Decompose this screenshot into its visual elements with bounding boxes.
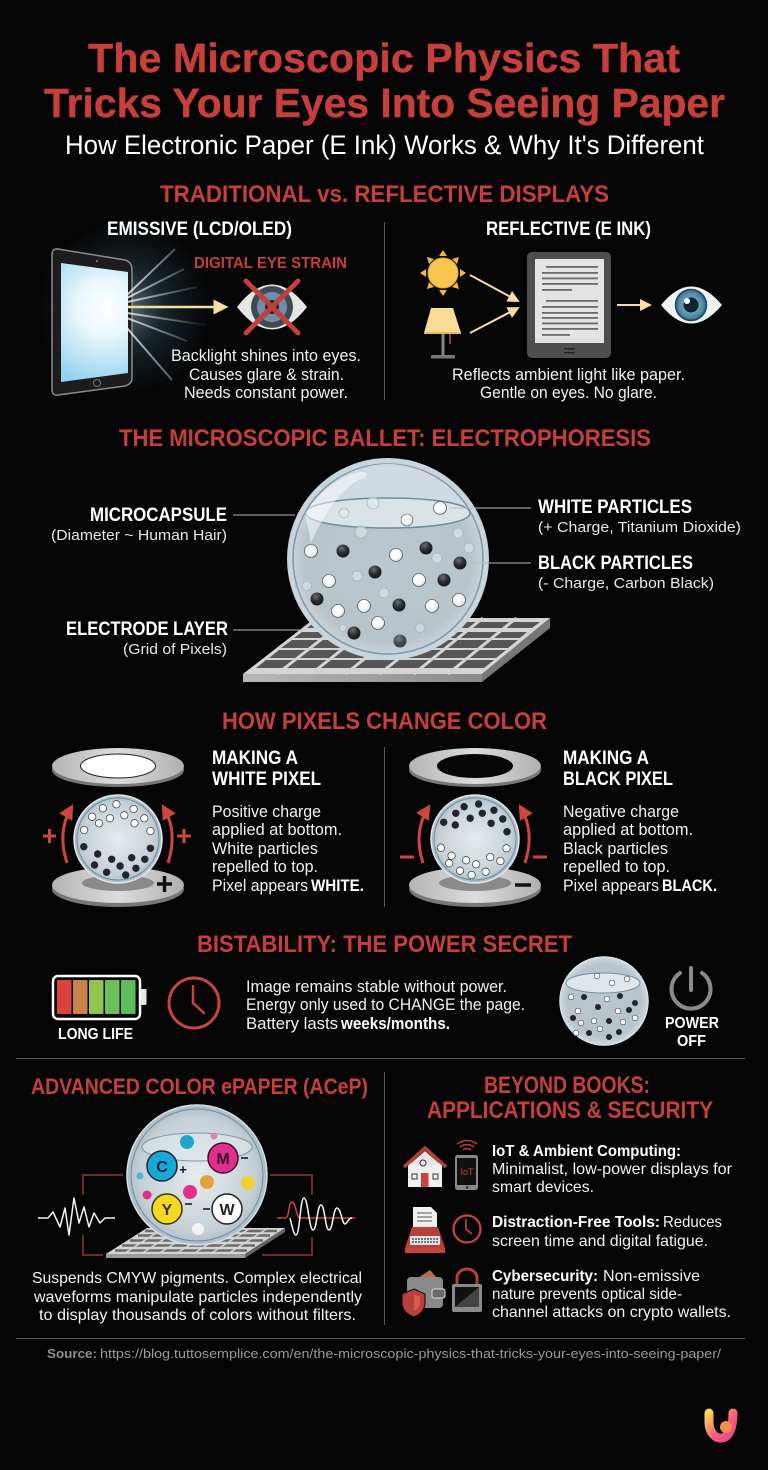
heading: applications and security <box>427 1072 713 1124</box>
icon: clock <box>169 978 219 1028</box>
icon: iot phone: IoT <box>460 1167 474 1177</box>
text: backlight description <box>171 346 361 402</box>
label: white particles: (+ Charge, Titanium Dioxide) <box>538 519 741 536</box>
icon: e-reader <box>527 252 611 358</box>
label: power off <box>665 1015 719 1050</box>
label: white particles <box>450 497 741 536</box>
diagram: white pixel capsule <box>43 748 191 907</box>
text: reflective description: Reflects ambient light like paper. <box>452 365 685 384</box>
label: black particles <box>468 553 714 592</box>
text: cybersecurity <box>492 1268 731 1321</box>
white particles <box>304 502 466 630</box>
text: reflective description: Gentle on eyes. No glare. <box>480 383 657 402</box>
text: white pixel: White particles <box>212 839 318 858</box>
text: black pixel: Pixel appears <box>563 876 659 895</box>
panel: reflective <box>420 219 722 402</box>
label: power off: POWER <box>665 1015 719 1032</box>
text: white pixel: MAKING A <box>212 748 298 769</box>
panel: bistability <box>53 957 719 1050</box>
icon: healthy eye <box>661 286 722 324</box>
source line: https://blog.tuttosemplice.com/en/the-microscopic-physics-that-tricks-your-eyes-into-seeing-paper/ <box>100 1346 721 1361</box>
text: white pixel: Pixel appears <box>212 876 308 895</box>
title: The Microscopic Physics That <box>88 35 680 81</box>
label: electrode layer: (Grid of Pixels) <box>123 641 227 658</box>
text: IoT: smart devices. <box>492 1179 594 1196</box>
arrow: reflected light <box>617 304 650 306</box>
heading: traditional vs reflective: TRADITIONAL vs. REFLECTIVE DISPLAYS <box>160 181 609 208</box>
label: white particles: WHITE PARTICLES <box>538 497 692 518</box>
label: black particles: (- Charge, Carbon Black) <box>538 575 714 592</box>
pigment: yellow <box>152 1194 192 1224</box>
text: cybersecurity: Non-emissive <box>603 1268 700 1285</box>
heading: bistability: BISTABILITY: THE POWER SECRET <box>197 931 572 958</box>
arrow: lamplight <box>470 308 518 333</box>
heading: microscopic ballet: THE MICROSCOPIC BALLET: ELECTROPHORESIS <box>119 425 651 452</box>
icon: battery <box>53 976 146 1019</box>
panel: beyond books <box>402 1072 733 1321</box>
text: black pixel: MAKING A <box>563 748 649 769</box>
diagram: black pixel capsule <box>400 748 547 907</box>
text: ACeP description: to display thousands of colors without filters. <box>39 1307 356 1324</box>
text: cybersecurity: channel attacks on crypto wallets. <box>492 1304 731 1321</box>
icon: typewriter <box>405 1207 445 1253</box>
pigment: cyan: + <box>179 1162 187 1177</box>
panel: black pixel <box>400 748 717 907</box>
callout: digital eye strain: DIGITAL EYE STRAIN <box>194 255 347 272</box>
icon: locked tablet <box>452 1269 482 1312</box>
arrow: light into eye <box>128 306 226 308</box>
text: ACeP description: Suspends CMYW pigments. Complex electrical <box>32 1270 362 1287</box>
label: long life: LONG LIFE <box>58 1026 133 1043</box>
text: backlight description: Backlight shines into eyes. <box>171 346 361 365</box>
text: reflective description <box>452 365 685 402</box>
label: microcapsule: MICROCAPSULE <box>90 505 227 526</box>
icon: stable capsule <box>560 957 648 1045</box>
sphere <box>288 459 488 659</box>
text: distraction free: Reduces <box>663 1214 722 1231</box>
chart: input waveform <box>38 1198 115 1235</box>
text: cybersecurity: nature prevents optical side- <box>492 1286 682 1303</box>
text: black pixel <box>563 748 717 895</box>
text: backlight description: Needs constant power. <box>184 383 348 402</box>
text: IoT: Minimalist, low-power displays for <box>492 1161 733 1178</box>
heading: applications and security: BEYOND BOOKS: <box>484 1072 650 1099</box>
text: black pixel: BLACK PIXEL <box>563 769 673 790</box>
arrow: sunlight <box>470 275 518 301</box>
text: white pixel: WHITE PIXEL <box>212 769 321 790</box>
text: bistability description: Battery lasts <box>246 1014 338 1033</box>
text: black pixel: Negative charge <box>563 802 679 821</box>
pigment: magenta: M <box>216 1151 230 1168</box>
source line: Source: <box>47 1346 97 1361</box>
icon: wallet with shield <box>402 1270 445 1317</box>
text: white pixel <box>212 748 364 895</box>
pigment: white: W <box>219 1202 235 1219</box>
pigment: cyan: C <box>156 1159 168 1176</box>
text: backlight description: Causes glare & strain. <box>189 365 344 384</box>
text: bistability description: Energy only used to CHANGE the page. <box>246 995 525 1014</box>
pigment: yellow: Y <box>162 1202 173 1219</box>
heading: how pixels change color: HOW PIXELS CHANGE COLOR <box>222 708 547 735</box>
panel: advanced color epaper <box>31 1074 368 1324</box>
text: IoT: IoT & Ambient Computing: <box>492 1143 681 1160</box>
diagram: color capsule <box>83 1105 312 1258</box>
panel: white pixel <box>43 748 364 907</box>
black particles <box>310 542 466 648</box>
text: distraction free: Distraction-Free Tools: <box>492 1214 660 1231</box>
text: black pixel: Black particles <box>563 839 668 858</box>
heading: reflective: REFLECTIVE (E INK) <box>486 219 651 240</box>
label: black particles: BLACK PARTICLES <box>538 553 693 574</box>
icon: crossed eye <box>237 281 307 333</box>
label: microcapsule: (Diameter ~ Human Hair) <box>51 527 227 544</box>
text: black pixel: BLACK. <box>662 876 717 895</box>
text: cybersecurity: Cybersecurity: <box>492 1268 598 1285</box>
text: bistability description <box>246 977 525 1033</box>
label: power off: OFF <box>677 1033 706 1050</box>
chart: output waveform <box>277 1198 355 1235</box>
label: microcapsule <box>51 505 295 544</box>
title: Tricks Your Eyes Into Seeing Paper <box>44 80 725 126</box>
pigment: white <box>203 1194 242 1224</box>
icon: iot phone <box>455 1140 478 1190</box>
heading: applications and security: APPLICATIONS & SECURITY <box>427 1097 713 1124</box>
text: black pixel: applied at bottom. <box>563 820 693 839</box>
text: distraction free <box>492 1214 722 1250</box>
text: ACeP description: waveforms manipulate particles independently <box>33 1289 362 1306</box>
icon: power off <box>672 968 710 1009</box>
label: electrode layer: ELECTRODE LAYER <box>66 619 228 640</box>
pigment: magenta <box>208 1143 248 1173</box>
electrode plate <box>243 618 550 682</box>
icon: small clock <box>454 1216 480 1242</box>
heading: emissive: EMISSIVE (LCD/OLED) <box>107 219 292 240</box>
icon: sun <box>420 250 466 296</box>
text: white pixel: repelled to top. <box>212 857 318 876</box>
text: white pixel: applied at bottom. <box>212 820 342 839</box>
icon: tablet with backlight <box>37 220 213 396</box>
label: electrode layer <box>66 619 302 658</box>
text: white pixel: WHITE. <box>311 876 364 895</box>
icon: smart home <box>404 1148 446 1187</box>
text: white pixel: Positive charge <box>212 802 321 821</box>
heading: ACeP: ADVANCED COLOR ePAPER (ACeP) <box>31 1074 368 1099</box>
text: distraction free: screen time and digital fatigue. <box>492 1233 708 1250</box>
text: bistability description: weeks/months. <box>340 1014 450 1033</box>
pigment: cyan <box>147 1151 187 1181</box>
panel: emissive <box>37 219 361 402</box>
subtitle: How Electronic Paper (E Ink) Works & Why It's Different <box>65 130 704 160</box>
logo <box>709 1413 733 1438</box>
faint particles <box>302 497 474 632</box>
icon: lamp <box>424 308 461 358</box>
title <box>44 35 725 126</box>
text: IoT <box>492 1143 733 1196</box>
text: bistability description: Image remains stable without power. <box>246 977 507 996</box>
text: ACeP description <box>32 1270 362 1324</box>
diagram: microcapsule on electrode layer <box>243 459 550 682</box>
text: black pixel: repelled to top. <box>563 857 670 876</box>
